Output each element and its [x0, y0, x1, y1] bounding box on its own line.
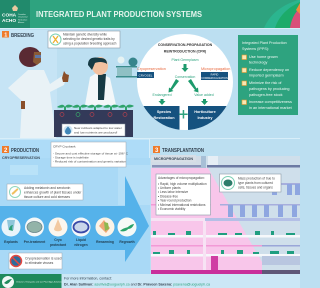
plant germplasm flow	[152, 58, 214, 105]
lab background	[0, 158, 150, 274]
upper shelves	[220, 183, 300, 206]
heading: production: CRYOPRESERVATION	[2, 155, 40, 160]
logo	[2, 5, 28, 24]
callout: genetic diversity: selecting for desired genetic traits by	[63, 37, 115, 41]
process steps	[2, 218, 136, 247]
header banner	[0, 0, 300, 29]
checklist: pathogens by producing	[249, 87, 290, 91]
shelf with plants	[116, 56, 138, 78]
callout: mass production: type plants from cultured	[238, 181, 273, 185]
callout: eliminate viruses	[9, 253, 62, 269]
subheading: micropropagation	[151, 155, 196, 162]
footer logo bar: Ontario's Vineyards and our Plant Agri-Solutions	[16, 280, 64, 284]
callout: genetic diversity	[48, 31, 120, 48]
process arrow	[0, 176, 149, 262]
label: cryopreservation	[137, 67, 166, 78]
callout: advantages of micropropagation: Advantages of micropropagation:	[158, 176, 205, 180]
checklist: imported germplasm	[249, 74, 284, 78]
callout: melatonin and serotonin: tissue culture and cold stresses	[24, 195, 70, 199]
checklist: Increase competitiveness	[249, 100, 292, 104]
step: cryoprotectant: protectant	[50, 243, 67, 247]
heading: production	[2, 146, 40, 160]
callout: new cultivars: and low nutrients are produced!	[74, 130, 117, 134]
panel: transplantation	[151, 146, 301, 274]
contact info: For more information, contact:	[64, 276, 112, 280]
step: explants: Explants	[4, 240, 18, 244]
heading: breeding: BREEDING	[11, 33, 34, 39]
callout: melatonin and serotonin	[7, 184, 83, 200]
callout: CRYP cryobank: CRYP Cryobank	[53, 144, 76, 148]
checklist: Use home grown	[249, 55, 278, 59]
logo: Ornamental	[18, 16, 28, 18]
label: micropropagation: COMMERCIALIZATION	[201, 77, 228, 80]
contact info: Dr. Alan Sullivan: asulliva@uoguelph.ca and Dr. Praveen Saxena: psaxena@uoguelph.ca	[64, 282, 210, 286]
callout: advantages of micropropagation: • Year-round production	[158, 199, 192, 203]
callout: advantages of micropropagation: • Less labor intensive	[158, 190, 188, 194]
heading: transplantation: TRANSPLANTATION	[162, 148, 204, 154]
species restoration and horticulture boxes: Restoration	[153, 116, 175, 120]
growth room illustration	[151, 156, 301, 274]
logo: Alliance	[18, 21, 24, 24]
callout: new cultivars: New cultivars adapted to low water	[74, 126, 122, 130]
title: INTEGRATED PLANT PRODUCTION SYSTEMS	[36, 10, 203, 19]
section backgrounds	[0, 30, 300, 274]
step: rewarming: Rewarming	[96, 240, 114, 244]
plant germplasm flow: Value added	[194, 93, 214, 97]
intro text: Integrated Plant Production	[242, 41, 287, 45]
checklist: in an international market	[249, 106, 293, 110]
checklist: Minimize the risk of	[249, 81, 282, 85]
label: cryopreservation: CRYOGEL	[139, 73, 153, 77]
label: cryopreservation: Cryopreservation	[137, 67, 166, 71]
callout: genetic diversity: Maintain genetic diversity while	[63, 32, 107, 36]
checklist	[242, 55, 293, 110]
logo: ACHO	[2, 18, 16, 24]
checklist: Reduce dependency on	[249, 68, 289, 72]
callout: advantages of micropropagation: • Minimal international restrictions	[158, 203, 206, 207]
footer	[0, 274, 300, 288]
logo: Canadian	[18, 14, 26, 16]
callout: genetic diversity: using a population breeding approach	[63, 42, 117, 46]
heading: transplantation: 3	[155, 148, 159, 154]
step: cryoprotectant	[48, 218, 68, 247]
heading: breeding: 1	[4, 32, 7, 38]
species restoration and horticulture boxes: Horticulture	[194, 110, 216, 114]
pipes	[203, 221, 206, 270]
heading: CPR: REINTRODUCTION (CPR)	[164, 50, 206, 54]
species restoration and horticulture boxes	[144, 106, 226, 130]
callout: advantages of micropropagation: • Economic viability	[158, 207, 186, 211]
heading: breeding	[2, 31, 34, 39]
callout: mass production	[220, 174, 281, 192]
callout: melatonin and serotonin: enhances growth of plant tissues under	[24, 190, 82, 194]
checklist: technology	[249, 60, 267, 64]
label: micropropagation: RAPID	[211, 74, 219, 76]
callout: new cultivars	[62, 124, 125, 136]
plants	[153, 231, 295, 254]
seedling bench	[54, 105, 134, 137]
heading: CPR: CONSERVATION-PROPAGATION	[158, 43, 213, 47]
panel: conservation-propagation circle	[137, 34, 233, 132]
decorative leaf	[264, 0, 300, 28]
panel: production	[0, 142, 150, 274]
callout: eliminate viruses: to eliminate viruses	[25, 261, 54, 265]
callout: CRYP cryobank: - Reduced risk of contamination and genetic variation	[53, 160, 126, 164]
white shelves	[151, 235, 301, 238]
plant germplasm flow: Endangered	[152, 93, 172, 97]
footer logo bar	[0, 274, 64, 288]
callout: melatonin and serotonin: Adding melatonin and serotonin	[24, 186, 71, 190]
species restoration and horticulture boxes: Industry	[198, 116, 213, 120]
panel: breeding	[2, 31, 138, 138]
callout: mass production: cells, tissues and organs	[238, 186, 273, 190]
panel: integrated plant production systems benefits	[238, 35, 298, 115]
contact info	[64, 276, 210, 286]
callout: advantages of micropropagation: • Uniform plants	[158, 186, 181, 190]
callout: advantages of micropropagation	[156, 174, 210, 215]
step: regrowth: Regrowth	[119, 240, 135, 244]
logo: Horticulture	[18, 18, 27, 22]
plant germplasm flow: Plant Germplasm	[171, 58, 199, 62]
heading: production: 2	[4, 148, 8, 154]
callout: CRYP cryobank	[51, 142, 129, 167]
species restoration and horticulture boxes: Species	[157, 110, 171, 114]
callout: mass production: Mass production of true to	[238, 176, 275, 180]
heading: transplantation	[153, 146, 204, 154]
callout: advantages of micropropagation: • Rapid, high volume multiplication	[158, 182, 207, 186]
plant germplasm flow: Conservation	[175, 75, 195, 79]
label: micropropagation: Micropropagation	[201, 67, 230, 71]
scientist man	[85, 57, 116, 105]
label: micropropagation	[201, 67, 230, 80]
callout: eliminate viruses: Cryopreservation is used	[25, 256, 62, 260]
subheading: micropropagation: MICROPROPAGATION	[154, 157, 193, 161]
callout: CRYP cryobank: - Storage time is indefinite	[53, 156, 89, 160]
step: liquid nitrogen	[72, 218, 90, 247]
step: liquid nitrogen: Liquid	[76, 238, 86, 242]
step: cryoprotectant: Cryo	[54, 238, 62, 242]
scientist woman	[8, 47, 69, 138]
heading: production: PRODUCTION	[11, 148, 39, 154]
checklist: pathogen-free stock	[249, 93, 283, 97]
callout: CRYP cryobank: - Secure and cost effective storage of tissue at -196° C	[53, 152, 129, 156]
callout: advantages of micropropagation: • Disease-free	[158, 194, 178, 198]
step: liquid nitrogen: nitrogen	[74, 243, 88, 247]
logo: COHA	[2, 12, 17, 18]
step: pre-treatment: Pre-treatment	[24, 240, 46, 244]
intro text: Systems (IPPS):	[242, 47, 269, 51]
